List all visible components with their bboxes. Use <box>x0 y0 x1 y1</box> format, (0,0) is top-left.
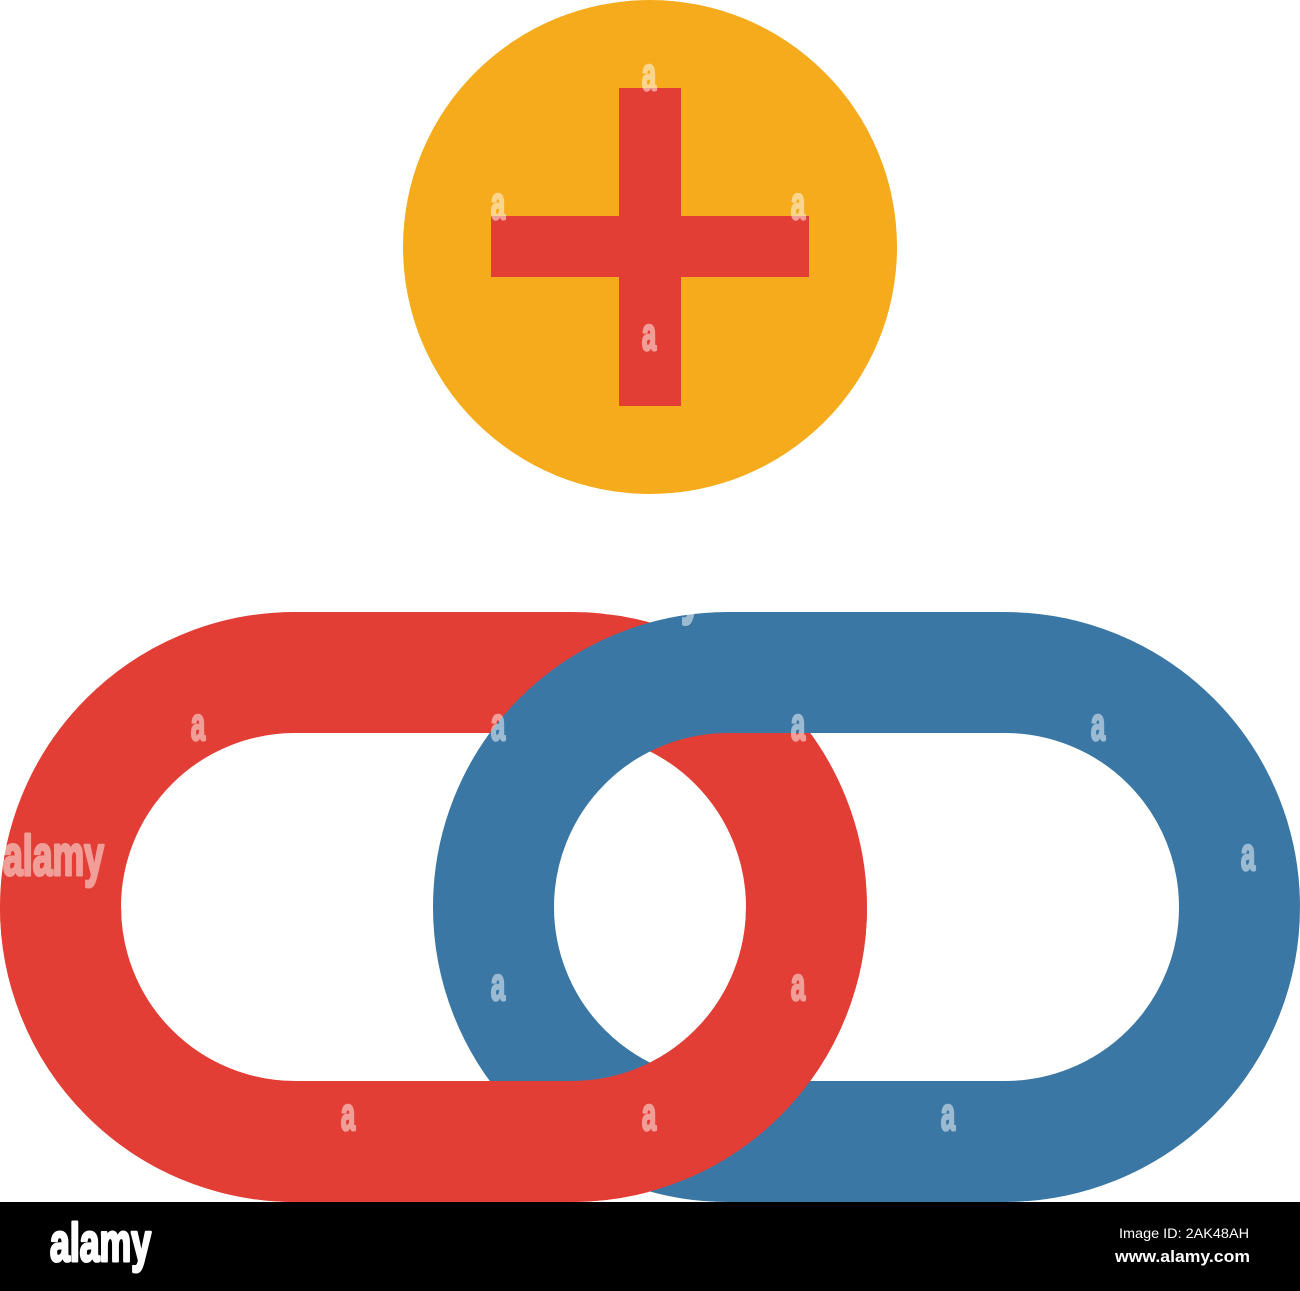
icon: orange circle with red plus <box>403 0 897 494</box>
footer bar <box>0 1202 1300 1291</box>
watermark: repeated letters over the icon: a <box>491 698 505 750</box>
watermark: repeated letters over the icon: a <box>642 48 656 100</box>
watermark: repeated letters over the icon: a <box>791 177 805 229</box>
watermark: repeated letters over the icon: a <box>642 308 656 360</box>
watermark: repeated letters over the icon: a <box>491 958 505 1010</box>
watermark: repeated letters over the icon: a <box>642 1088 656 1140</box>
footer website: www.alamy.com <box>1114 1247 1250 1266</box>
watermark: alamy word on red link: alamy <box>3 825 104 888</box>
watermark: repeated letters over the icon: a <box>491 177 505 229</box>
watermark: repeated letters over the icon: a <box>1241 828 1255 880</box>
icon: interlocked chain links <box>60 672 1240 1142</box>
watermark: alamy word cropped at top of blue link: alamy <box>600 562 701 626</box>
watermark: repeated letters over the icon: a <box>941 1088 955 1140</box>
watermark: repeated letters over the icon: a <box>341 1088 355 1140</box>
watermark: repeated letters over the icon: a <box>791 698 805 750</box>
watermark: repeated letters over the icon: a <box>791 958 805 1010</box>
footer image id: Image ID: 2AK48AH <box>1119 1225 1249 1241</box>
footer logo: alamy <box>50 1213 151 1273</box>
watermark: repeated letters over the icon: a <box>191 698 205 750</box>
watermark: repeated letters over the icon: a <box>1091 698 1105 750</box>
